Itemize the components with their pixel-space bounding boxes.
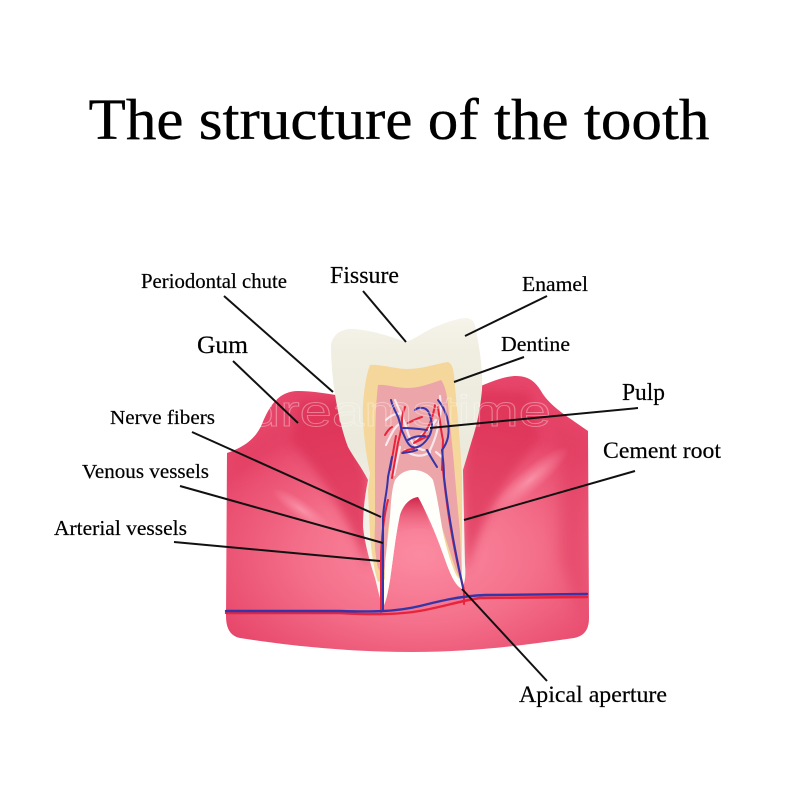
label: dentine: Dentine xyxy=(501,332,570,356)
enamel and root xyxy=(331,318,482,607)
shadow inside root arch xyxy=(397,497,432,535)
labels xyxy=(54,263,721,708)
label: gum: Gum xyxy=(197,330,248,359)
tooth xyxy=(331,318,482,607)
arterial vessels red xyxy=(226,405,587,614)
label: enamel: Enamel xyxy=(522,272,588,296)
watermark: dreamstime xyxy=(248,387,551,436)
venous vessels blue xyxy=(226,400,587,611)
label: apical aperture: Apical aperture xyxy=(519,682,667,708)
gum shading xyxy=(278,390,589,600)
white nerve fibers xyxy=(386,396,443,475)
title: The structure of the tooth xyxy=(88,87,710,152)
leader lines xyxy=(174,291,638,681)
label: venous vessels: Venous vessels xyxy=(82,461,209,483)
label: pulp: Pulp xyxy=(622,380,665,406)
dentine xyxy=(363,362,462,582)
label: arterial vessels: Arterial vessels xyxy=(54,516,187,540)
label: periodontal chute: Periodontal chute xyxy=(141,269,287,293)
label: cement root: Cement root xyxy=(603,438,721,464)
pulp xyxy=(375,380,462,583)
tooth structure infographic xyxy=(54,98,721,708)
label: fissure: Fissure xyxy=(330,263,399,289)
white inner root xyxy=(383,470,462,607)
gum xyxy=(226,376,589,652)
label: nerve fibers: Nerve fibers xyxy=(110,407,215,429)
